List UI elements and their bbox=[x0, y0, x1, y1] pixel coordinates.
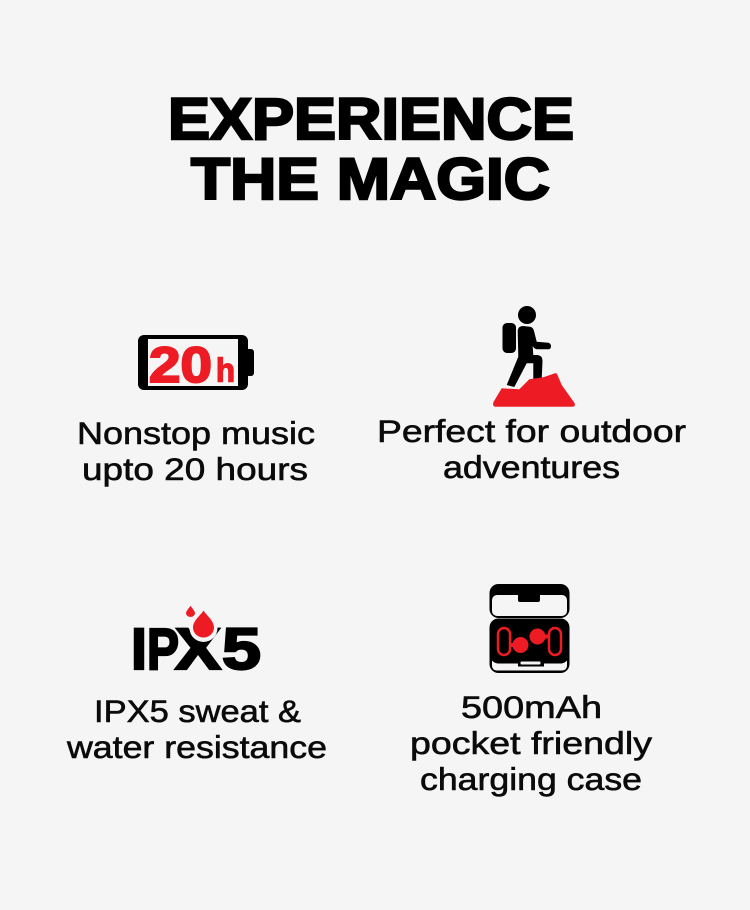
text: water resistance caption: water resistance bbox=[66, 729, 327, 765]
icon: IPX5 water drops: 5 bbox=[222, 617, 261, 682]
icon: IPX5 water drops: I bbox=[131, 617, 147, 682]
text: water resistance caption bbox=[66, 693, 327, 765]
icon: battery 20h bbox=[138, 335, 254, 393]
text: charging case caption: 500mAh bbox=[461, 689, 602, 725]
icon: IPX5 water drops bbox=[131, 606, 261, 682]
title: THE MAGIC bbox=[191, 147, 550, 212]
icon: charging case with earbuds bbox=[490, 584, 570, 673]
title: EXPERIENCE bbox=[168, 87, 574, 152]
icon: battery 20h: 20 bbox=[149, 337, 212, 393]
text: battery caption bbox=[77, 415, 315, 487]
text: charging case caption: charging case bbox=[420, 761, 642, 797]
text: outdoor caption bbox=[377, 413, 686, 485]
text: outdoor caption: Perfect for outdoor bbox=[377, 413, 686, 449]
panel: water resistance bbox=[66, 606, 327, 765]
text: charging case caption bbox=[410, 689, 652, 797]
text: charging case caption: pocket friendly bbox=[410, 725, 652, 761]
icon: IPX5 water drops: P bbox=[147, 617, 179, 682]
text: battery caption: Nonstop music bbox=[77, 415, 315, 451]
text: outdoor caption: adventures bbox=[443, 449, 620, 485]
text: water resistance caption: IPX5 sweat & bbox=[94, 693, 301, 729]
icon: battery 20h: h bbox=[216, 352, 235, 388]
panel: battery life bbox=[77, 335, 315, 487]
text: battery caption: upto 20 hours bbox=[82, 451, 308, 487]
title bbox=[168, 87, 574, 212]
panel: outdoor adventures bbox=[377, 306, 686, 485]
icon: IPX5 water drops: X bbox=[175, 617, 221, 682]
icon: hiker on mountain bbox=[493, 306, 575, 407]
panel: charging case bbox=[410, 584, 652, 797]
